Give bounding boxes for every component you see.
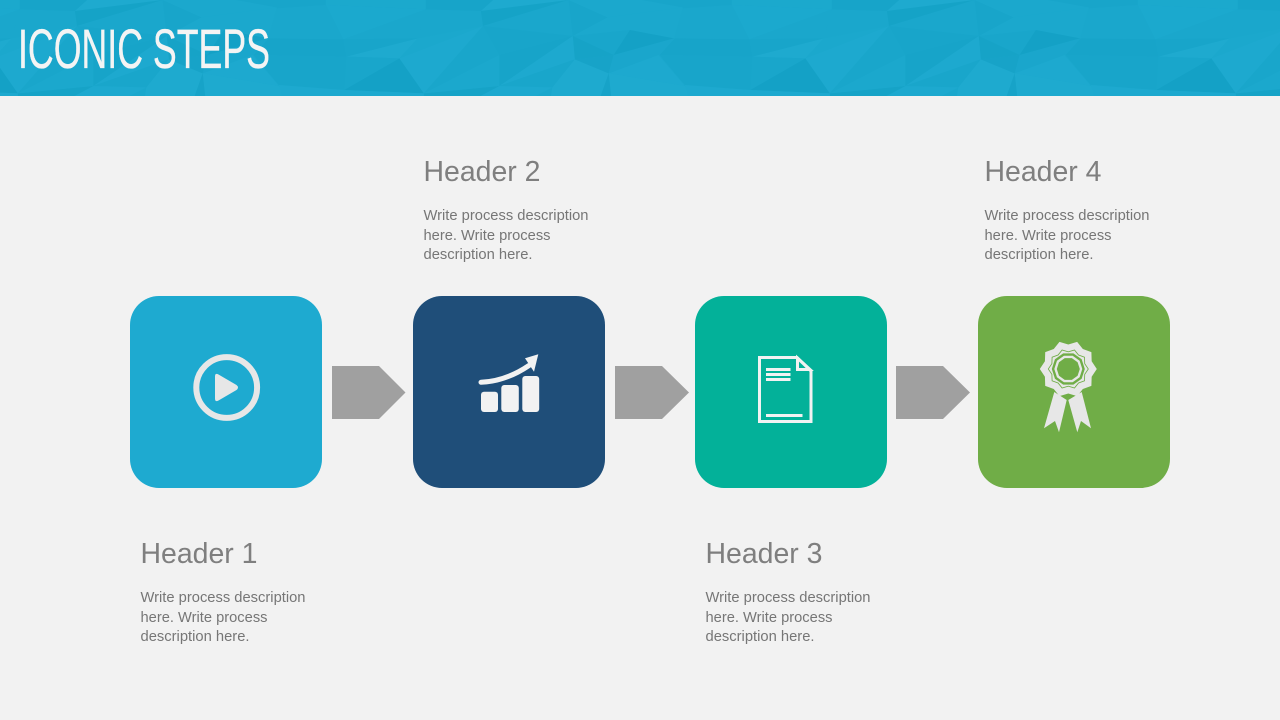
text block: header 2: Write process description (424, 208, 588, 224)
text block: header 3: description here. (706, 629, 814, 645)
text block: header 3 (706, 538, 870, 645)
title: ICONIC STEPS (18, 17, 270, 80)
text block: header 1: Header 1 (140, 538, 258, 570)
text block: header 3: Header 3 (706, 538, 822, 570)
arrow 1 (332, 366, 406, 419)
text block: header 4: here. Write process (984, 228, 1112, 244)
text block: header 4: Header 4 (984, 156, 1102, 188)
text block: header 2: Header 2 (424, 156, 540, 188)
arrow 2 (615, 366, 689, 419)
step 3 box (695, 296, 887, 488)
header banner (0, 0, 1280, 100)
text block: header 2 (424, 156, 588, 263)
text block: header 2: description here. (424, 247, 532, 263)
icon: play button (196, 357, 257, 418)
step 1 box (130, 296, 322, 488)
text block: header 4 (984, 156, 1150, 263)
text block: header 1: here. Write process (140, 610, 268, 626)
step 4 box (978, 296, 1170, 488)
arrow 3 (896, 366, 970, 419)
text block: header 3: here. Write process (706, 610, 832, 626)
text block: header 4: Write process description (984, 208, 1150, 224)
text block: header 1 (140, 538, 306, 645)
text block: header 1: Write process description (140, 590, 306, 606)
text block: header 2: here. Write process (424, 228, 550, 244)
text block: header 1: description here. (140, 629, 250, 645)
text block: header 3: Write process description (706, 590, 870, 606)
icon: rising bar chart (481, 354, 539, 412)
text block: header 4: description here. (984, 247, 1094, 263)
icon: award ribbon (1040, 342, 1097, 432)
icon: document (760, 358, 811, 422)
step 2 box (413, 296, 605, 488)
